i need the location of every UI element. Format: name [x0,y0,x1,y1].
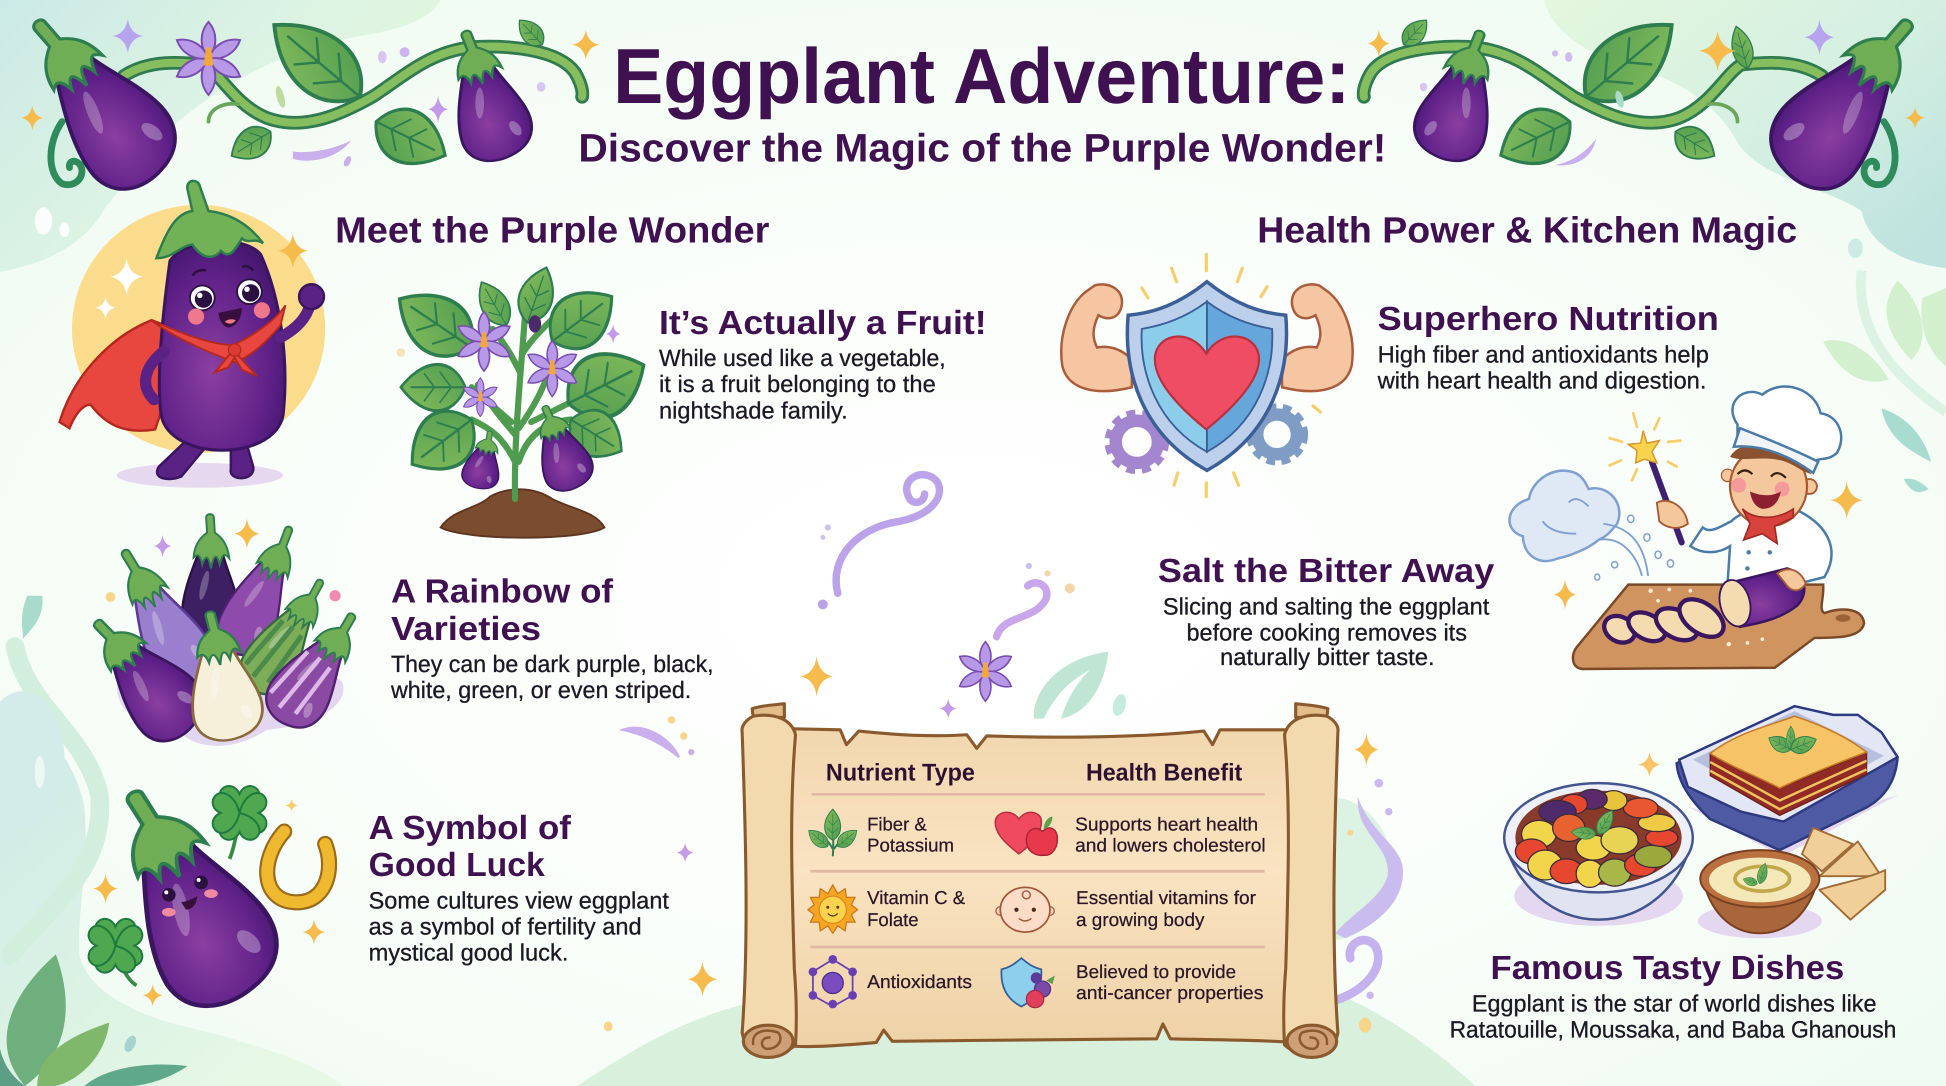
pita wedges [1802,828,1885,920]
horseshoe [267,832,329,902]
flowers [455,312,513,371]
row: anti-cancer: anti-cancer properties [1076,983,1263,1004]
cape [60,320,233,431]
row: fiber and potassium: Potassium [867,835,954,856]
text block: varieties [390,573,714,704]
icon: baby face [996,887,1054,932]
face [162,876,218,917]
arm: right [1282,284,1353,391]
sparkles: right [1368,20,1925,166]
text block: good luck: A Symbol of [369,809,572,846]
illustration: chef with wand [1510,387,1864,669]
text block: famous tasty dishes: Ratatouille, Moussaka, and Baba Ghanoush [1450,1018,1896,1044]
striped eggplant [256,598,379,739]
text block: it's a fruit: It’s Actually a Fruit! [659,304,987,341]
row: essential vitamins: Essential vitamins for [1076,888,1256,909]
sparkles: left [21,19,599,168]
row: antioxidants: Antioxidants [867,972,972,993]
eggplant: large left [0,0,193,205]
parchment sheet [782,729,1297,1047]
text block: it's a fruit: it is a fruit belonging to the [659,372,936,398]
light purple eggplant [97,535,225,701]
text block: salt the bitter away: Slicing and salting the eggplant [1163,595,1490,621]
background blob: top right [1544,0,1946,268]
background blob: top left [0,0,441,272]
gears [1108,407,1304,470]
cut eggplant [1715,568,1806,630]
steam [1543,499,1648,576]
background blob: bottom left [0,714,343,1086]
calyx [156,181,263,258]
heart [1155,336,1259,429]
text block: superhero nutrition [1376,300,1719,395]
body [159,241,285,450]
eggplant: large right [1753,0,1946,205]
row: anti-cancer: Believed to provide [1076,962,1236,983]
row: fiber and potassium [867,814,954,856]
leaf: stem right [1727,24,1757,71]
text block: salt the bitter away: before cooking removes its [1186,621,1467,647]
scarf [1742,509,1793,544]
text block: it's a fruit: While used like a vegetable, [659,346,946,372]
green eggplant [231,566,344,705]
sparkles: right of scroll [1354,734,1379,1033]
illustration: famous dishes [1504,706,1899,938]
shield [1127,282,1287,470]
ratatouille bowl [1504,783,1693,920]
icon: shield and berries [1001,958,1055,1008]
decorative leaves: right [1823,238,1946,492]
icon: flower [173,22,244,95]
leaf: large [255,3,379,120]
text block: salt the bitter away: Salt the Bitter Away [1158,552,1494,590]
text block: famous tasty dishes [1450,949,1896,1044]
text block: good luck: as a symbol of fertility and [369,915,642,941]
text block: good luck [369,809,670,967]
row: anti-cancer [1076,962,1263,1004]
background blob: behind waves [1263,797,1392,941]
text block: good luck: mystical good luck. [369,941,568,967]
row: vitamin c and folate [867,888,965,931]
illustration: varieties bunch [69,514,379,753]
vine garland: right [1364,0,1946,205]
rays [1142,254,1320,496]
leaf: large right [1567,3,1691,120]
table header [826,760,1243,787]
mid purple eggplant [209,516,315,664]
soil [441,489,604,538]
leaf: lower [365,98,457,179]
vine garland: left [0,0,599,205]
icon: heart and apple [995,812,1057,855]
lasagna dish [1677,706,1898,850]
text block: varieties: A Rainbow of [391,573,614,610]
illustration: shield with muscles [1061,254,1353,496]
sparkles [93,799,325,1007]
clover: top [213,786,266,859]
leaf: top small [512,14,549,52]
text block: it's a fruit: nightshade family. [659,398,848,424]
title [578,34,1386,170]
background hill: bottom centre [577,987,1476,1086]
arm: left [1061,284,1132,391]
face [190,285,215,310]
table header: Nutrient Type [826,760,975,787]
legs [157,441,253,479]
icon: leaf sprig [804,809,861,856]
row: supports heart health: and lowers cholesterol [1075,835,1266,856]
illustration: superhero eggplant mascot [60,181,325,488]
decorative white drops: top left [35,207,70,237]
fruits [459,427,508,492]
row: vitamin c and folate: Vitamin C & [867,888,965,909]
text block: varieties: They can be dark purple, black, [391,652,714,678]
text block: superhero nutrition: Superhero Nutrition [1378,300,1719,338]
icon: antioxidant molecule [809,955,857,1008]
white eggplant [176,605,267,745]
subtitle: Discover the Magic of the Purple Wonder! [578,125,1386,170]
text block: superhero nutrition: High fiber and antioxidants help [1378,343,1709,369]
text block: salt the bitter away [1158,552,1494,671]
eggplant [80,764,295,1024]
leaves [384,276,487,371]
text block: salt the bitter away: naturally bitter taste. [1220,645,1435,671]
shadows [1514,794,1899,938]
head [1721,446,1817,526]
illustration: lucky eggplant [80,764,329,1024]
cutting board [1573,585,1864,669]
text block: superhero nutrition: with heart health and digestion. [1376,369,1706,395]
decorative leaves: bottom left [0,954,187,1086]
sparkles [105,519,341,602]
chef coat [1690,507,1831,583]
salt specks [1648,588,1764,646]
text block: varieties: Varieties [391,610,541,647]
leaf: small lower [224,119,279,169]
chef hat [1732,387,1841,473]
right roll [1284,704,1338,1057]
eggplant: small right [1407,20,1514,169]
row: essential vitamins [1076,888,1256,931]
leaf: small lower right [1667,119,1722,169]
decorative swirls and sparkles: centre [604,475,1128,1031]
clover: lower [89,919,142,985]
title: Eggplant Adventure: [613,34,1350,120]
text block: famous tasty dishes: Eggplant is the star of world dishes like [1472,992,1876,1018]
decorative waves: right of scroll [1335,779,1403,1000]
dark eggplant [182,514,239,644]
row: vitamin c and folate: Folate [867,910,919,931]
text block: good luck: Good Luck [369,846,546,884]
eggplant slices [1600,592,1730,648]
text block: famous tasty dishes: Famous Tasty Dishes [1491,949,1844,987]
eggplant: small left [432,20,539,169]
row: supports heart health [1075,814,1266,856]
table header: Health Benefit [1086,760,1243,787]
heading: left section: Meet the Purple Wonder [335,210,770,251]
leaf: top small right [1397,14,1434,52]
dark purple eggplant [69,598,216,753]
cloud [1510,471,1619,561]
leaf: lower right [1489,98,1581,179]
hummus bowl [1700,850,1819,933]
sparkles [1554,482,1863,609]
icon: centre flower [957,642,1014,701]
heading: right section: Health Power & Kitchen Magic [1257,210,1797,251]
text block: varieties: white, green, or even striped. [390,678,691,704]
illustration: eggplant plant [384,262,658,538]
icon: sun [808,885,858,933]
text block: it's a fruit [659,304,987,424]
row: essential vitamins: a growing body [1076,910,1205,931]
row: fiber and potassium: Fiber & [867,814,927,835]
stem and branches [472,298,571,499]
decorative ribbon: left [0,596,100,956]
row: supports heart health: Supports heart health [1075,814,1258,835]
neck band and scarf [151,305,285,362]
left roll [742,704,796,1057]
panel: parchment scroll table [742,704,1338,1057]
text block: good luck: Some cultures view eggplant [369,889,670,915]
hand and wand [1610,413,1688,542]
arms [146,304,310,400]
